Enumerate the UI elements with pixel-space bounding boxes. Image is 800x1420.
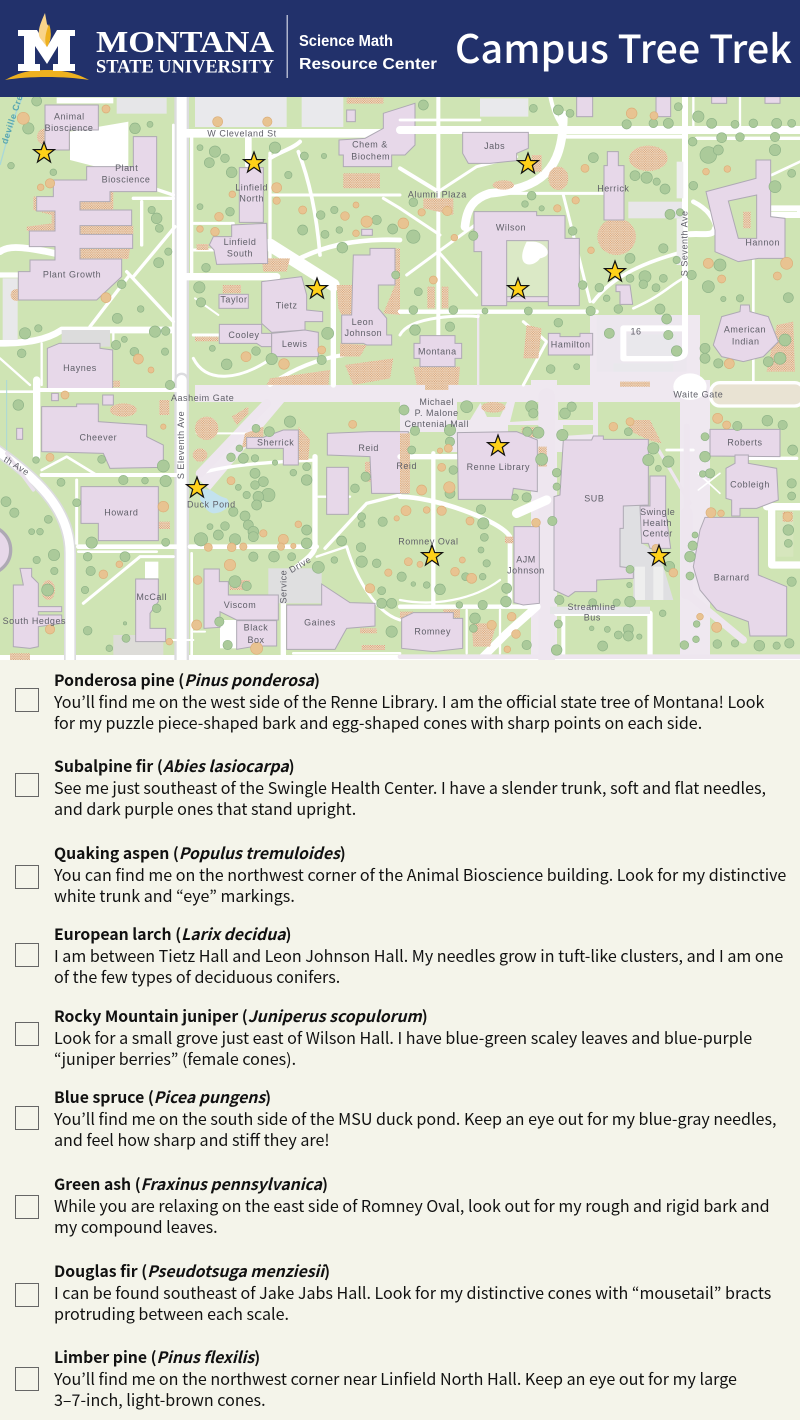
roads southeast [400,373,800,660]
item: Quaking aspen: white trunk and “eye” markings. [54,883,295,907]
logo wordmark [96,24,275,78]
map labels northwest: Plant [115,163,138,173]
campus map [0,97,800,660]
map labels northeast: S Seventh Ave [679,210,689,276]
map labels southeast: Reid [396,461,417,471]
item: Ponderosa pine [15,668,764,734]
map labels northeast: Hamilton [551,340,591,350]
item: Limber pine [15,1345,737,1411]
item: Blue spruce: Blue spruce (Picea pungens) [54,1085,271,1108]
item: Limber pine: Limber pine (Pinus flexilis) [54,1345,260,1368]
star: Wilson courtyard [508,278,528,298]
map labels northwest: Animal [54,111,85,121]
roads southwest [0,380,400,660]
logo wordmark: STATE UNIVERSITY [96,56,274,78]
map labels southeast: Michael [419,397,454,407]
mulch beds southeast [400,382,793,647]
map labels northeast: Jabs [484,141,505,151]
map labels northeast: Hannon [745,238,780,248]
map labels northwest: W Cleveland St [207,129,277,139]
quadrant northeast [398,95,800,385]
map labels northwest: Taylor [220,295,248,305]
item: Green ash: my compound leaves. [54,1214,218,1238]
item: Douglas fir [15,1259,771,1325]
map labels northeast: Montana [418,347,457,357]
map labels northwest: Leon [352,317,374,327]
tree list [0,660,800,1420]
map labels northeast: Alumni Plaza [408,190,467,200]
map labels northwest: South [227,249,253,259]
item: Limber pine: You’ll find me on the northwest corner near Linfield North Hall. Keep an eye out for my large [54,1366,737,1390]
map labels northwest: Chem & [352,139,388,149]
map labels southeast: Johnson [507,566,545,576]
item: Douglas fir: I can be found southeast of Jake Jabs Hall. Look for my distinctive cones with “mousetail” bracts [54,1280,771,1304]
item: Rocky Mountain juniper: Look for a small grove just east of Wilson Hall. I have blue-green scaley leaves and blue-purple [54,1025,752,1049]
map labels northwest: Tietz [276,301,298,311]
item: Blue spruce [15,1085,776,1151]
item: Subalpine fir: Subalpine fir (Abies lasiocarpa) [54,754,295,777]
buildings northwest [18,103,415,390]
star: Rocky Mountain juniper [604,261,626,281]
map labels southeast: Bus [584,613,601,623]
star: Limber pine [244,152,264,172]
map labels northwest: Plant Growth [43,270,101,280]
map labels southeast: Swingle [640,507,675,517]
map labels southwest: Drive [287,554,313,575]
map labels southeast: Renne Library [467,462,530,472]
item: Green ash [15,1172,770,1238]
map labels northeast: 16 [630,326,642,336]
map labels southeast: Health [643,518,672,528]
map labels southwest [2,393,379,645]
item: European larch: I am between Tietz Hall and Leon Johnson Hall. My needles grow in tuft-like clusters, and I am one [54,943,783,967]
star: Blue spruce [186,477,208,497]
header banner [0,0,800,97]
item: Rocky Mountain juniper: “juniper berries” (female cones). [54,1046,296,1070]
item: Douglas fir: Douglas fir (Pseudotsuga menziesii) [54,1259,330,1282]
map labels southeast: Cobleigh [730,480,770,490]
buildings northeast [414,97,785,367]
map labels southeast: Roberts [727,438,763,448]
lavender plazas [0,315,800,660]
map labels southeast: Romney [414,627,451,637]
quadrant southwest [0,380,408,661]
map labels northwest: Bioscience [45,123,93,133]
map labels northeast: American [724,325,766,335]
icon: Montana State University logo [5,13,89,80]
trees southwest [1,380,399,654]
mulch beds northeast [413,146,795,385]
mulch beds northwest [11,98,400,385]
trees southeast [397,401,798,655]
map labels southwest: Viscom [224,600,256,610]
map labels northeast: Wilson [496,223,526,233]
item: Green ash: While you are relaxing on the east side of Romney Oval, look out for my rough and rigid bark and [54,1193,770,1217]
title: Campus Tree Trek [455,19,793,75]
map labels northwest: North [239,194,264,204]
map labels northwest: Lewis [282,339,307,349]
item: Quaking aspen: Quaking aspen (Populus tremuloides) [54,841,346,864]
map labels northwest: Linfield [235,183,268,193]
star: European larch [306,278,328,298]
map labels southeast: Romney Oval [398,537,458,547]
map labels southwest: Howard [104,508,138,518]
roads northwest [0,95,400,385]
quadrant northwest [0,83,415,390]
map labels northeast [408,141,780,357]
roads northeast [400,95,800,385]
map labels northwest: Cooley [228,330,260,340]
item: Blue spruce: and feel how sharp and stiff they are! [54,1127,330,1151]
map labels southwest: S Eleventh Ave [176,411,186,479]
buildings southeast [402,429,787,652]
item: Ponderosa pine: for my puzzle piece-shaped bark and egg-shaped cones with sharp points on each side. [54,710,702,734]
map labels northwest: Linfield [224,237,256,247]
item: Subalpine fir: and dark purple ones that stand upright. [54,796,356,820]
buildings southwest [0,393,408,649]
map labels southwest: Cheever [79,433,117,443]
trees northeast [398,100,796,373]
map labels southeast: Streamline [568,602,616,612]
star: Quaking aspen [34,142,54,162]
map labels northeast: Herrick [597,184,629,194]
item: Rocky Mountain juniper: Rocky Mountain juniper (Juniperus scopulorum) [54,1004,428,1027]
item: European larch: European larch (Larix decidua) [54,922,292,945]
item: Rocky Mountain juniper [15,1004,752,1070]
logo wordmark: MONTANA [96,24,275,59]
map labels southwest: Service [279,570,289,604]
map labels southeast: Center [643,529,673,539]
item: European larch [15,922,783,988]
map labels southeast: Barnard [714,573,750,583]
map labels southeast: Waite Gate [673,390,723,400]
map labels southwest: Black [244,623,268,633]
map labels southwest: Duck Pond [187,500,236,510]
map labels southwest: South Hedges [3,616,66,626]
item: Blue spruce: You’ll find me on the south side of the MSU duck pond. Keep an eye out for my blue-gray needles, [54,1106,776,1130]
item: European larch: of the few types of deciduous conifers. [54,964,340,988]
item: Subalpine fir [15,754,766,820]
map labels southwest: Gaines [304,618,336,628]
map labels northwest: Johnson [344,328,382,338]
map labels southeast: SUB [584,494,604,504]
map labels southwest: Aasheim Gate [171,393,234,403]
item: Quaking aspen: You can find me on the northwest corner of the Animal Bioscience building. Look for my distinctive [54,862,786,886]
tree location stars [34,142,670,565]
map labels northwest: Bioscience [102,175,150,185]
map labels southeast [396,390,770,637]
item: Quaking aspen [15,841,786,907]
map labels southwest: McCall [136,592,167,602]
map labels southwest: Reid [358,443,379,453]
map labels southwest: Box [247,635,265,645]
map labels southeast: P. Malone [415,408,459,418]
map labels northwest: Haynes [63,363,97,373]
star: Ponderosa pine [488,435,508,455]
map labels northeast: Indian [732,337,760,347]
center name: Science Math [299,33,393,50]
mulch beds southwest [10,381,385,661]
star: Green ash [422,545,442,565]
map labels southwest: th Ave [2,454,31,477]
map labels northwest [0,83,390,373]
trees northwest [8,96,400,373]
duck pond [200,489,229,513]
map labels northwest: Biochem [351,151,390,161]
map labels southeast: Centenial Mall [404,419,469,429]
map labels southwest: Sherrick [257,438,294,448]
center name [299,33,437,73]
item: Green ash: Green ash (Fraxinus pennsylvanica) [54,1172,328,1195]
map labels southeast: AJM [516,555,536,565]
item: Ponderosa pine: You’ll find me on the west side of the Renne Library. I am the official state tree of Montana! Look [54,689,764,713]
item: Subalpine fir: See me just southeast of the Swingle Health Center. I have a slender trunk, soft and flat needles, [54,775,766,799]
item: Douglas fir: protruding between each scale. [54,1301,289,1325]
item: Ponderosa pine: Ponderosa pine (Pinus ponderosa) [54,668,320,691]
green lawn wedges in the mall [400,402,593,452]
star: Douglas fir [518,153,538,173]
center name: Resource Center [299,56,437,73]
star: Subalpine fir [648,545,670,565]
quadrant southeast [396,373,800,660]
item: Limber pine: 3–7-inch, light-brown cones. [54,1387,266,1411]
